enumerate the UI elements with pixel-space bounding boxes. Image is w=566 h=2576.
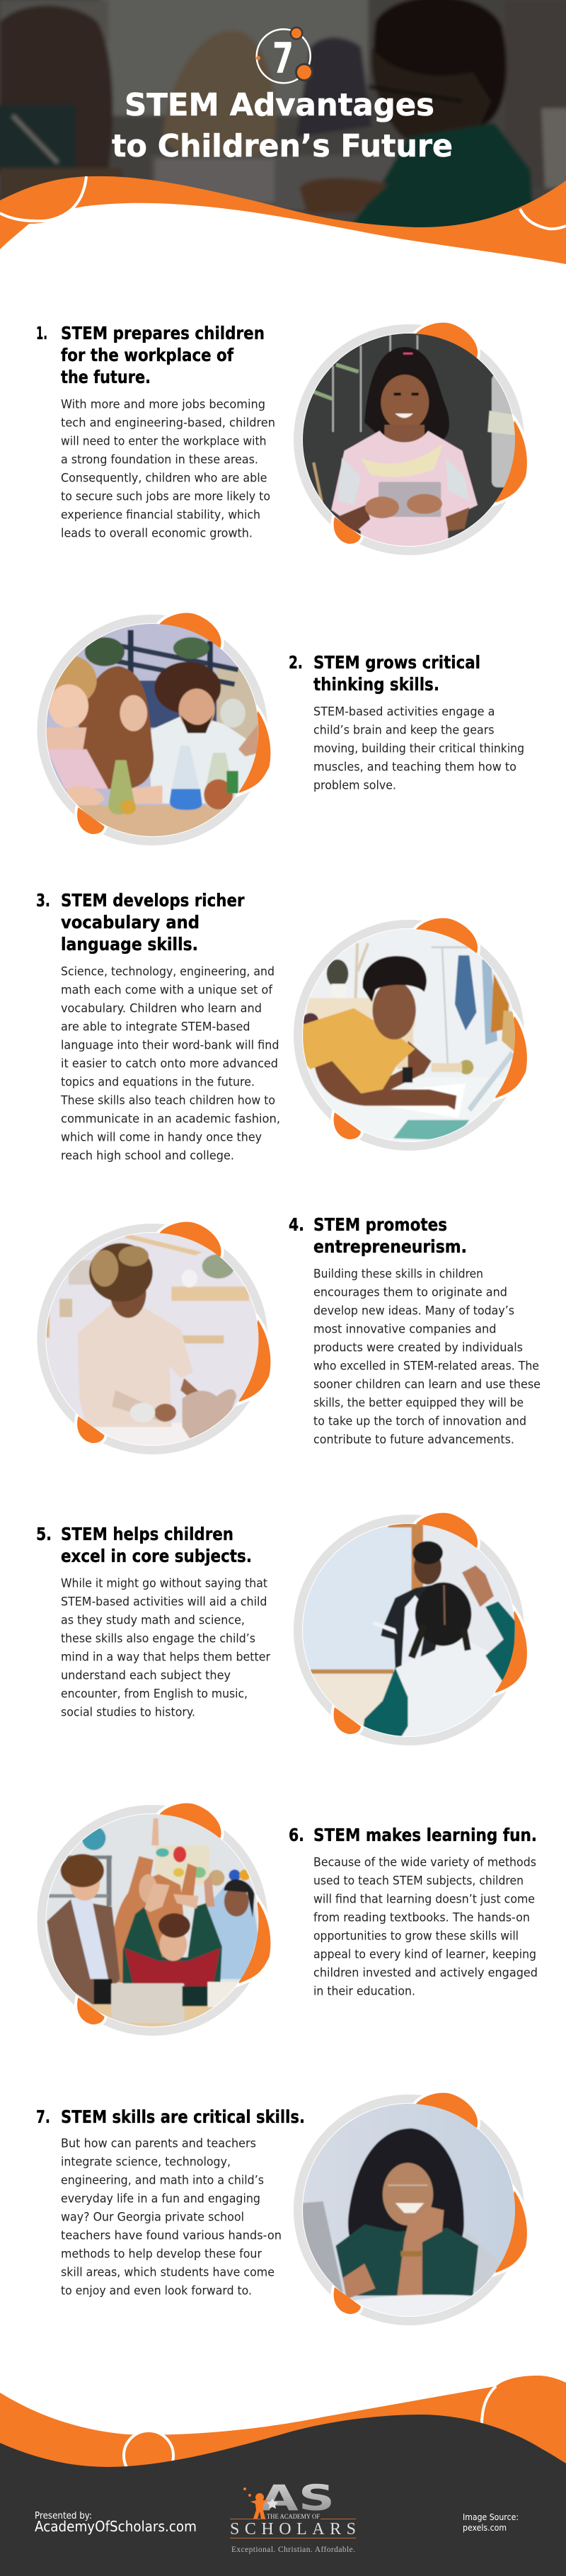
text block: advantage 4 <box>313 1267 541 1446</box>
text block: advantage 5: STEM-based activities will aid a child <box>61 1595 267 1609</box>
logo mark: AS lettering: AS <box>260 2478 335 2519</box>
photo frame: ring and orange blobs 3 <box>298 918 527 1146</box>
text block: advantage 1: With more and more jobs becoming <box>61 398 265 411</box>
heading: advantage 4 <box>289 1214 467 1257</box>
text block: advantage 5: understand each subject they <box>61 1668 231 1682</box>
text block: advantage 4: products were created by individuals <box>313 1341 523 1354</box>
text block: advantage 1: a strong foundation in these areas. <box>61 453 258 466</box>
heading: advantage 2: thinking skills. <box>313 674 439 695</box>
text block: advantage 3: topics and equations in the future. <box>61 1075 255 1089</box>
title <box>112 87 453 164</box>
heading: advantage 3: language skills. <box>61 934 198 954</box>
text block: advantage 6: used to teach STEM subjects, children <box>313 1874 524 1888</box>
photo: excited children around a laptop <box>42 1811 262 2033</box>
footer text: image source <box>463 2512 519 2533</box>
heading: advantage 4: 4. <box>289 1214 304 1235</box>
text block: advantage 4: Building these skills in children <box>313 1267 483 1280</box>
text block: advantage 3: which will come in handy once they <box>61 1130 262 1144</box>
text block: advantage 3: are able to integrate STEM-based <box>61 1020 250 1034</box>
heading: advantage 1: 1. <box>36 323 47 343</box>
panel: advantage 1 <box>36 323 529 554</box>
heading: advantage 5: 5. <box>36 1524 52 1544</box>
text block: advantage 5: as they study math and science, <box>61 1613 245 1627</box>
logo: The Academy of Scholars: Exceptional. Christian. Affordable. <box>231 2546 355 2554</box>
panel: advantage 5 <box>36 1513 527 1744</box>
text block: advantage 5: While it might go without saying that <box>61 1576 268 1590</box>
photo: teacher and children with flasks <box>40 623 260 845</box>
text block: advantage 6: appeal to every kind of learner, keeping <box>313 1947 536 1961</box>
text block: advantage 6 <box>313 1855 538 1998</box>
heading: advantage 4: STEM promotes <box>313 1214 447 1235</box>
text block: advantage 7: methods to help develop these four <box>61 2247 262 2260</box>
text block: advantage 4: contribute to future advancements. <box>313 1433 514 1446</box>
heading: advantage 1: the future. <box>61 367 151 387</box>
text block: advantage 3: vocabulary. Children who learn and <box>61 1001 262 1015</box>
footer: dark panel <box>0 2415 566 2576</box>
logo: The Academy of Scholars: THE ACADEMY OF <box>267 2514 320 2521</box>
text block: advantage 7: everyday life in a fun and engaging <box>61 2192 260 2205</box>
footer text: presented by: Presented by: <box>35 2510 92 2521</box>
text block: advantage 4: to take up the torch of innovation and <box>313 1415 526 1427</box>
footer wave: orange band <box>0 2376 566 2480</box>
text block: advantage 5: encounter, from English to music, <box>61 1687 248 1701</box>
heading: advantage 1 <box>36 323 265 387</box>
photo frame: ring and orange blobs 2 <box>41 613 270 841</box>
text block: advantage 5: mind in a way that helps them better <box>61 1650 270 1664</box>
text block: advantage 3: it easier to catch onto more advanced <box>61 1056 278 1071</box>
title: to Children’s Future <box>112 128 453 164</box>
text block: advantage 7: way? Our Georgia private school <box>61 2211 244 2223</box>
text block: advantage 5: social studies to history. <box>61 1705 195 1719</box>
heading: advantage 1: for the workplace of <box>61 345 234 365</box>
text block: advantage 3: reach high school and college. <box>61 1149 234 1163</box>
text block: advantage 4: encourages them to originate and <box>313 1286 507 1299</box>
text block: advantage 6: Because of the wide variety of methods <box>313 1855 536 1869</box>
text block: advantage 3: Science, technology, engineering, and <box>61 964 275 979</box>
text block: advantage 1 <box>61 398 275 540</box>
footer text: image source: pexels.com <box>463 2522 507 2533</box>
text block: advantage 2 <box>313 705 524 792</box>
footer text: presented by: AcademyOfScholars.com <box>35 2518 197 2535</box>
text block: advantage 2: STEM-based activities engage a <box>313 705 495 718</box>
photo: girl with tablet at chalkboard <box>303 334 515 546</box>
photo: woman shaping clay <box>47 1233 259 1445</box>
text block: advantage 3: language into their word-bank will find <box>61 1038 279 1052</box>
photo: boy writing at desk <box>303 929 515 1141</box>
header wave: orange band <box>0 176 566 264</box>
text block: advantage 2: problem solve. <box>313 779 396 792</box>
text block: advantage 2: muscles, and teaching them how to <box>313 760 516 773</box>
heading: advantage 5 <box>36 1524 252 1566</box>
photo frame: ring and orange blobs 1 <box>298 323 527 551</box>
heading: advantage 2 <box>289 652 480 695</box>
heading: advantage 7: 7. <box>36 2107 50 2127</box>
text block: advantage 6: opportunities to grow these skills will <box>313 1929 519 1943</box>
text block: advantage 1: tech and engineering-based, children <box>61 416 275 429</box>
heading: advantage 3 <box>36 890 245 954</box>
text block: advantage 3 <box>60 964 280 1163</box>
heading: advantage 2: 2. <box>289 652 303 673</box>
text block: advantage 3: communicate in an academic fashion, <box>61 1112 280 1126</box>
panel: advantage 7 <box>36 2093 527 2323</box>
text block: advantage 6: in their education. <box>313 1984 415 1998</box>
icon: numeral 7 badge: 7 <box>272 34 294 84</box>
text block: advantage 1: Consequently, children who are able <box>61 472 267 484</box>
text block: advantage 3: math each come with a unique set of <box>61 983 273 997</box>
heading: advantage 3: vocabulary and <box>61 912 200 933</box>
text block: advantage 6: will find that learning doesn’t just come <box>313 1892 535 1906</box>
text block: advantage 1: to secure such jobs are more likely to <box>61 490 270 503</box>
heading: advantage 5: excel in core subjects. <box>61 1546 252 1566</box>
text block: advantage 7: to enjoy and even look forward to. <box>61 2284 252 2297</box>
heading: advantage 5: STEM helps children <box>61 1524 233 1544</box>
text block: advantage 4: who excelled in STEM-related areas. The <box>313 1360 539 1372</box>
icon: orange child and stars <box>243 2487 278 2519</box>
heading: advantage 6: 6. <box>289 1825 304 1845</box>
text block: advantage 5: these skills also engage the child’s <box>61 1631 255 1646</box>
text block: advantage 7: teachers have found various hands-on <box>61 2229 282 2242</box>
heading: advantage 2: STEM grows critical <box>313 652 480 673</box>
icon: numeral 7 badge <box>256 27 313 84</box>
panel: advantage 2 <box>40 613 524 845</box>
text block: advantage 6: children invested and actively engaged <box>313 1966 538 1980</box>
text block: advantage 4: skills, the better equipped they will be <box>313 1396 524 1409</box>
footer text: presented by <box>35 2510 197 2535</box>
logo: The Academy of Scholars: SCHOLARS <box>230 2520 356 2538</box>
heading: advantage 6: STEM makes learning fun. <box>313 1825 537 1845</box>
text block: advantage 7: integrate science, technology, <box>61 2155 231 2168</box>
footer text: image source: Image Source: <box>463 2512 519 2522</box>
photo: student raising hand to teacher <box>303 1524 515 1736</box>
text block: advantage 2: moving, building their critical thinking <box>313 742 524 755</box>
text block: advantage 4: develop new ideas. Many of today’s <box>313 1304 514 1317</box>
heading: advantage 3: 3. <box>36 890 50 911</box>
text block: advantage 7: skill areas, which students have come <box>61 2266 275 2279</box>
panel: advantage 3 <box>36 890 527 1163</box>
text block: advantage 1: will need to enter the workplace with <box>61 435 266 448</box>
heading: advantage 1: STEM prepares children <box>61 323 265 343</box>
header photo: classroom background <box>0 0 566 227</box>
text block: advantage 1: leads to overall economic growth. <box>61 527 253 540</box>
photo frame: ring and orange blobs 6 <box>41 1803 270 2031</box>
text block: advantage 7: engineering, and math into a child’s <box>61 2174 264 2187</box>
panel: advantage 4 <box>40 1214 541 1455</box>
photo frame: ring and orange blobs 4 <box>41 1222 270 1450</box>
text block: advantage 2: child’s brain and keep the gears <box>313 724 494 736</box>
panel: advantage 6 <box>41 1803 538 2033</box>
text block: advantage 4: most innovative companies and <box>313 1323 497 1335</box>
photo frame: ring and orange blobs 7 <box>298 2093 527 2321</box>
heading: advantage 4: entrepreneurism. <box>313 1236 467 1257</box>
text block: advantage 6: from reading textbooks. The hands-on <box>313 1910 530 1925</box>
text block: advantage 4: sooner children can learn and use these <box>313 1378 541 1391</box>
text block: advantage 7: But how can parents and teachers <box>61 2137 256 2150</box>
text block: advantage 3: These skills also teach children how to <box>60 1093 275 1107</box>
text block: advantage 5 <box>61 1576 270 1719</box>
text block: advantage 7 <box>61 2137 282 2297</box>
heading: advantage 3: STEM develops richer <box>61 890 245 911</box>
text block: advantage 1: experience financial stability, which <box>61 508 260 521</box>
logo: The Academy of Scholars <box>230 2478 356 2554</box>
heading: advantage 7: STEM skills are critical skills. <box>61 2107 305 2127</box>
title: STEM Advantages <box>125 87 434 123</box>
photo: smiling woman with curly hair at laptop <box>303 2104 515 2316</box>
photo frame: ring and orange blobs 5 <box>298 1513 527 1741</box>
